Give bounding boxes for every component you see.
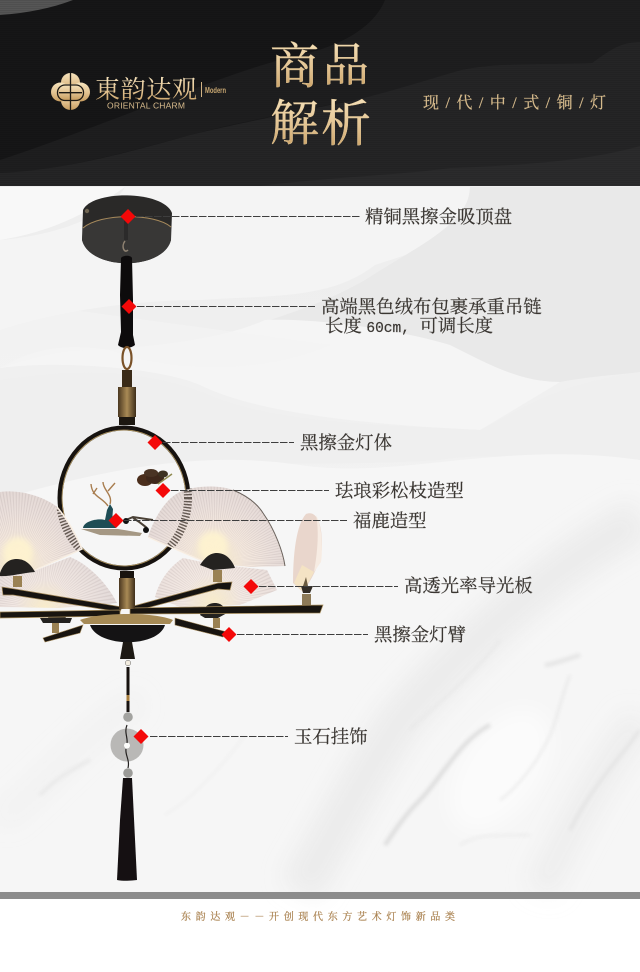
pine branch bbox=[137, 469, 172, 486]
logo: brand wordmark bbox=[95, 76, 226, 110]
panel: marble background bbox=[0, 186, 640, 892]
callout labels: 高透光率导光板 bbox=[404, 576, 533, 596]
illustration: chandelier bbox=[0, 195, 323, 881]
logo: brand wordmark: 東韵达观 bbox=[95, 76, 197, 104]
callout labels: 黑擦金灯臂 bbox=[374, 625, 466, 645]
logo: brand wordmark: Modern bbox=[205, 85, 226, 95]
footer bar bbox=[0, 892, 640, 899]
side lamp base bbox=[301, 577, 313, 605]
panel: dark header bbox=[0, 0, 640, 186]
cord bbox=[120, 642, 135, 722]
deer bbox=[81, 482, 153, 536]
callout labels: 精铜黑擦金吸顶盘 bbox=[365, 207, 512, 227]
footer slogan: 东韵达观－－开创现代东方艺术灯饰新品类 bbox=[181, 910, 460, 923]
front fan right bbox=[148, 486, 286, 567]
leader lines bbox=[124, 216, 398, 736]
front fan left bbox=[0, 491, 83, 572]
callout labels: 高端黑色绒布包裹承重吊链 bbox=[321, 297, 542, 317]
callout labels: 珐琅彩松枝造型 bbox=[335, 481, 464, 501]
ceiling plate bbox=[82, 195, 172, 263]
lamp caps bbox=[0, 553, 235, 623]
main horizontal arm bbox=[0, 605, 323, 618]
tassel bbox=[117, 778, 137, 881]
callout labels bbox=[294, 207, 542, 747]
callout labels: 福鹿造型 bbox=[353, 511, 427, 531]
upper arms bbox=[2, 582, 232, 612]
markers: red diamonds bbox=[108, 209, 258, 744]
title: 解 bbox=[270, 96, 319, 151]
logo: brand wordmark: ORIENTAL CHARM bbox=[107, 100, 185, 110]
callout labels: 玉石挂饰 bbox=[294, 727, 368, 747]
subtitle: 现/代/中/式/铜/灯 bbox=[423, 94, 606, 112]
title: 析 bbox=[321, 96, 371, 152]
callout labels: 黑擦金灯体 bbox=[300, 433, 392, 453]
central brass column bbox=[119, 571, 135, 609]
logo: brand mark bbox=[51, 73, 90, 110]
side fan bbox=[293, 513, 322, 592]
title: 品 bbox=[323, 40, 369, 91]
back fan right bbox=[155, 558, 277, 607]
wrapped chain bbox=[118, 218, 135, 369]
callout labels: 长度 60cm, 可调长度 bbox=[325, 316, 493, 337]
pendant ring bbox=[60, 428, 188, 568]
lamp posts bbox=[13, 570, 222, 633]
lower arms and hub bbox=[43, 614, 227, 642]
title bbox=[270, 39, 371, 152]
brass stem bbox=[118, 370, 136, 425]
back fan left bbox=[0, 557, 117, 608]
jade pendant bbox=[110, 725, 144, 778]
title: 商 bbox=[270, 39, 319, 94]
